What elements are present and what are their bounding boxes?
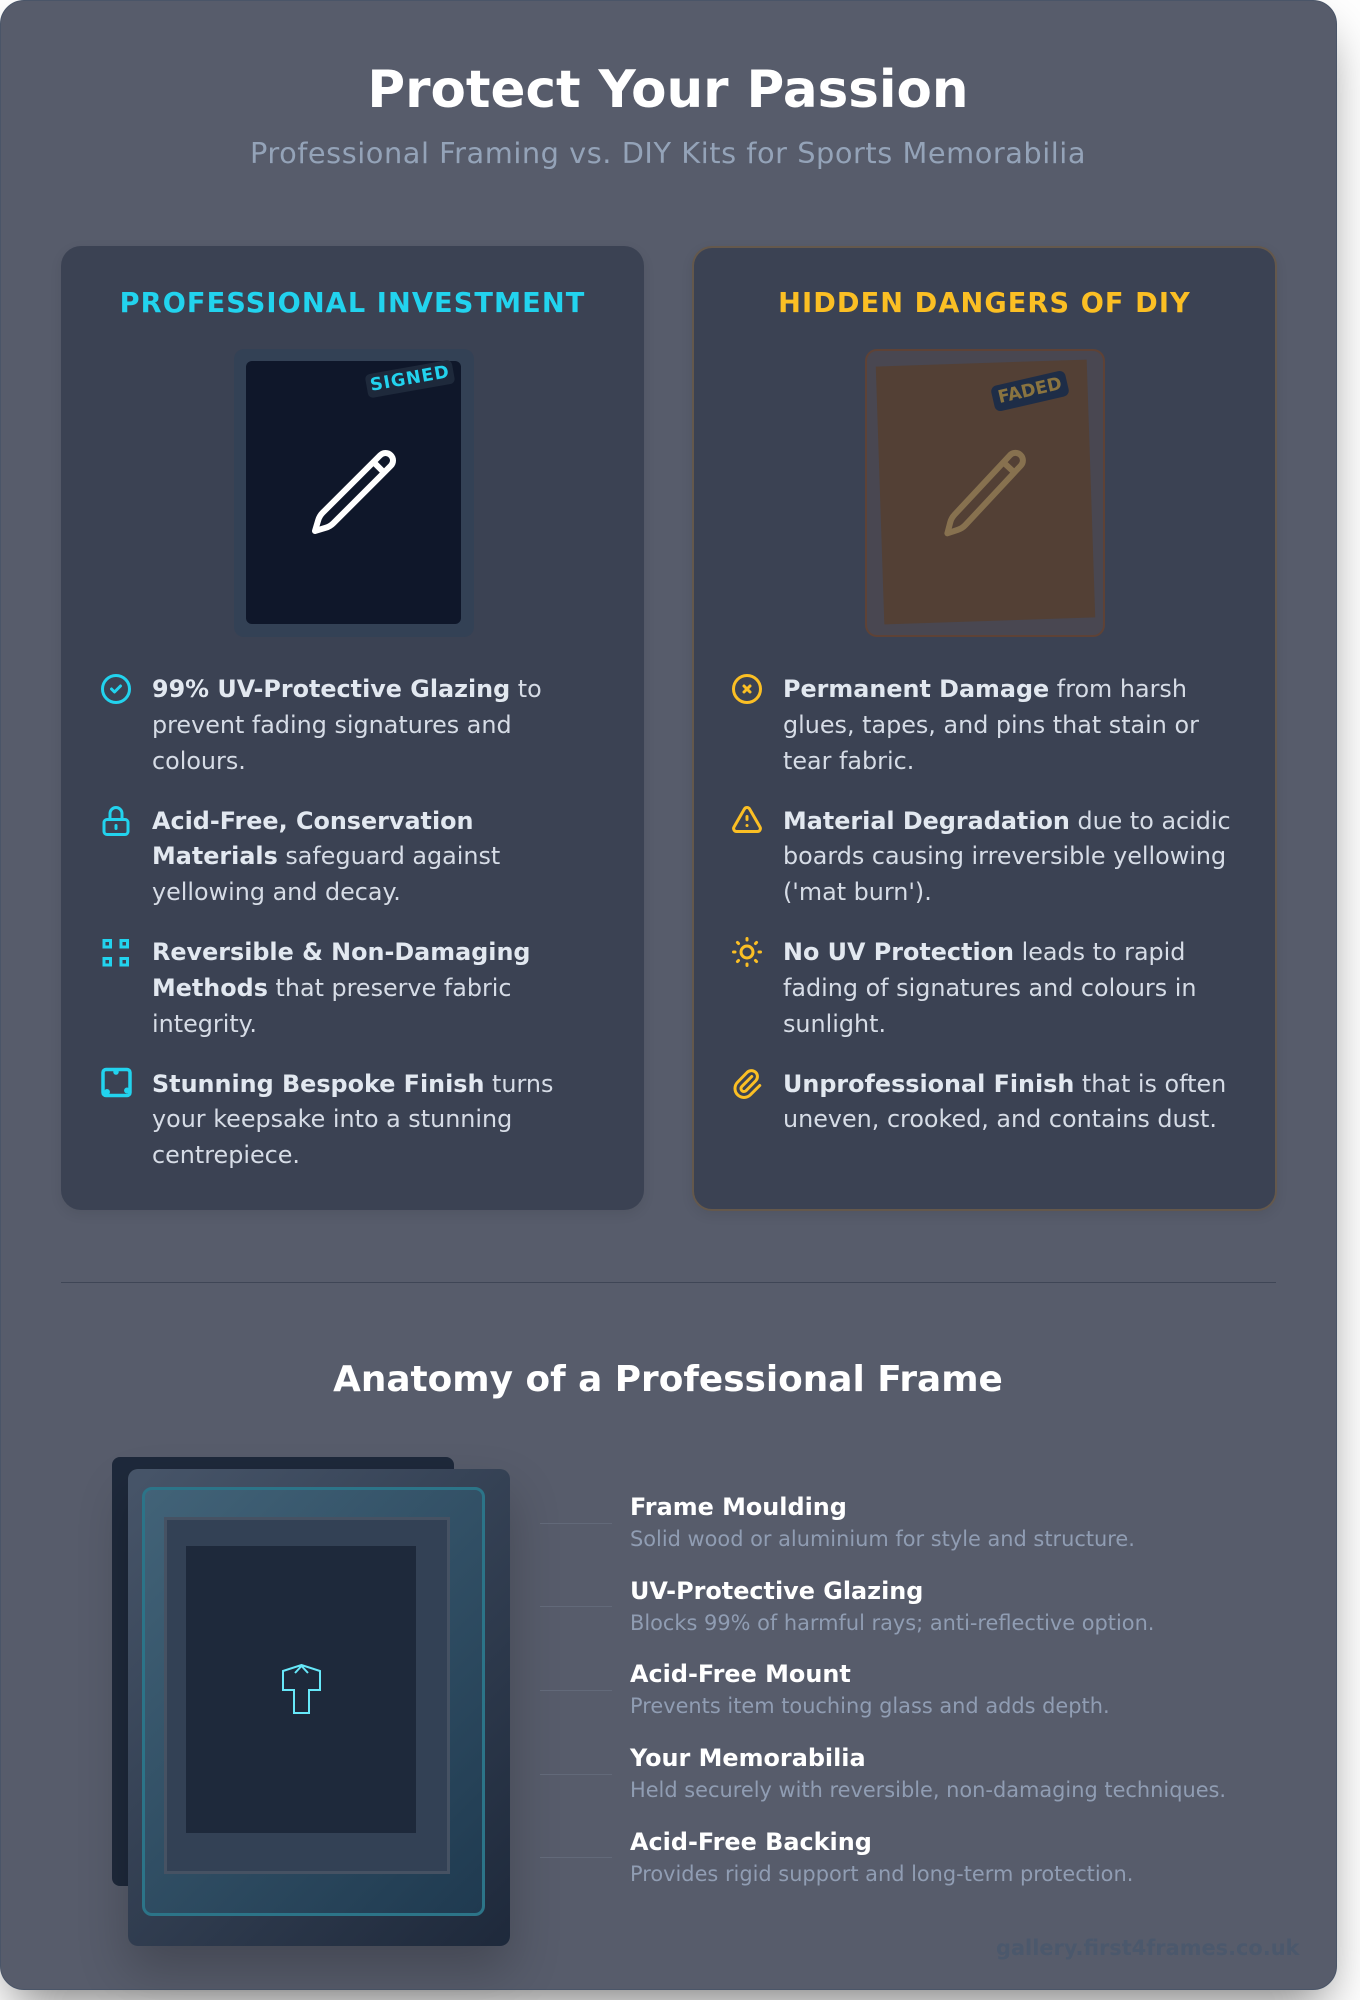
label: glazing: UV-Protective Glazing (630, 1577, 923, 1605)
frame diagram (112, 1457, 520, 1980)
text: reversible (152, 938, 530, 1038)
description: memorabilia: Held securely with reversible, non-damaging techniques. (630, 1778, 1226, 1802)
text: permanent damage: Permanent Damage from harsh (783, 675, 1187, 703)
watermark: gallery.first4frames.co.uk (996, 1936, 1299, 1960)
description: backing: Provides rigid support and long-term protection. (630, 1862, 1133, 1886)
text: material degradation: Material Degradation due to acidic (783, 806, 1231, 834)
text: acid-free: Materials safeguard against (152, 842, 500, 870)
text: permanent damage: tear fabric. (783, 747, 914, 775)
title: Protect Your Passion (367, 60, 969, 120)
text: uv glazing: colours. (152, 747, 246, 775)
list item: unprofessional finish (734, 1069, 1226, 1133)
text: bespoke finish: Stunning Bespoke Finish turns (152, 1070, 553, 1098)
description: frame moulding: Solid wood or aluminium for style and structure. (630, 1527, 1135, 1551)
faded label (990, 370, 1070, 412)
text: acid-free: Acid-Free, Conservation (152, 806, 473, 834)
icon: grid (102, 939, 129, 966)
heading: professional investment: PROFESSIONAL INVESTMENT (120, 288, 585, 319)
signed label: SIGNED (369, 362, 451, 396)
text: uv glazing: prevent fading signatures and (152, 711, 512, 739)
text: unprofessional finish: Unprofessional Finish that is often (783, 1070, 1226, 1098)
faded item backing (875, 360, 1095, 624)
icon: pen (312, 450, 396, 534)
description: glazing: Blocks 99% of harmful rays; anti-reflective option. (630, 1611, 1154, 1635)
layer: glazing (142, 1487, 485, 1916)
icon: sun (732, 937, 762, 967)
text: permanent damage (783, 675, 1199, 775)
list item: uv glazing (101, 674, 542, 775)
heading: hidden dangers: HIDDEN DANGERS OF DIY (778, 288, 1191, 319)
faded label: FADED (996, 374, 1064, 408)
list item: permanent damage (732, 674, 1199, 775)
signed item backing (246, 361, 461, 624)
text: unprofessional finish: uneven, crooked, and contains dust. (783, 1105, 1217, 1133)
layer: memorabilia (186, 1546, 416, 1833)
text: reversible: Methods that preserve fabric (152, 974, 512, 1002)
label: mount: Acid-Free Mount (630, 1660, 851, 1688)
label: frame moulding: Frame Moulding (630, 1493, 847, 1521)
text: uv glazing: 99% UV-Protective Glazing to (152, 675, 542, 703)
section heading: anatomy: Anatomy of a Professional Frame (333, 1359, 1003, 1400)
text: bespoke finish: centrepiece. (152, 1141, 300, 1169)
text: material degradation: boards causing irreversible yellowing (783, 842, 1226, 870)
framed faded item (865, 349, 1105, 637)
list item: acid-free (102, 806, 500, 906)
text: no uv protection (783, 938, 1196, 1038)
label: memorabilia: Your Memorabilia (630, 1744, 866, 1772)
text: bespoke finish: your keepsake into a stunning (152, 1105, 512, 1133)
label: backing: Acid-Free Backing (630, 1828, 872, 1856)
text: material degradation: ('mat burn'). (783, 878, 932, 906)
text: reversible: Reversible & Non-Damaging (152, 938, 530, 966)
icon: x circle (732, 674, 762, 704)
list item: material degradation (732, 806, 1231, 906)
text: no uv protection: fading of signatures and colours in (783, 974, 1196, 1002)
framed signed item (234, 349, 474, 637)
layer: frame moulding (128, 1469, 510, 1946)
icon: warning (732, 806, 762, 833)
text: acid-free: yellowing and decay. (152, 878, 401, 906)
icon: faded pen (944, 450, 1026, 536)
list item: reversible (102, 938, 530, 1038)
layer: backing (112, 1457, 454, 1886)
layer: mount (164, 1517, 450, 1874)
text: material degradation (783, 806, 1231, 906)
text: no uv protection: sunlight. (783, 1010, 886, 1038)
description: mount: Prevents item touching glass and adds depth. (630, 1694, 1110, 1718)
list item: bespoke finish (101, 1068, 553, 1169)
text: acid-free (152, 806, 500, 906)
text: no uv protection: No UV Protection leads to rapid (783, 938, 1185, 966)
icon: check circle (101, 674, 131, 704)
list item: no uv protection (732, 937, 1196, 1038)
text: unprofessional finish (783, 1070, 1226, 1133)
text: permanent damage: glues, tapes, and pins that stain or (783, 711, 1199, 739)
icon: paperclip (734, 1069, 762, 1099)
subtitle: Professional Framing vs. DIY Kits for Sports Memorabilia (250, 136, 1086, 170)
icon: shirt (282, 1664, 321, 1714)
panel: hidden dangers of diy (692, 246, 1276, 1211)
text: uv glazing (152, 675, 542, 775)
panel: professional investment (61, 246, 644, 1210)
icon: expand frame (101, 1068, 132, 1098)
text: reversible: integrity. (152, 1010, 257, 1038)
text: bespoke finish (152, 1070, 553, 1169)
icon: lock (102, 806, 130, 836)
